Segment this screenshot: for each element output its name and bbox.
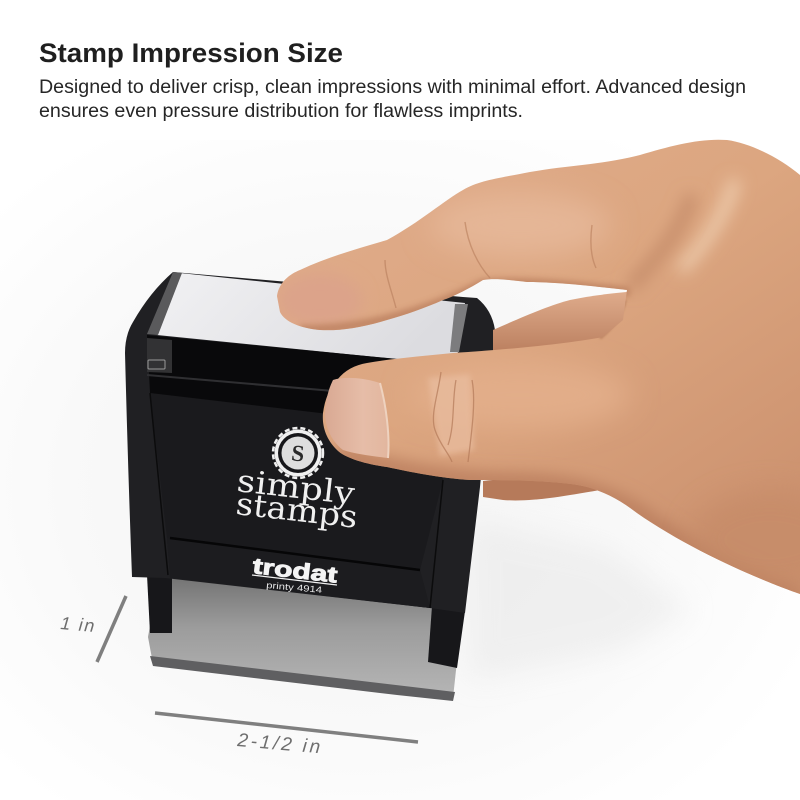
hand shading [278, 180, 800, 596]
icon: stamp [125, 272, 495, 701]
back of hand ridge highlight [680, 180, 735, 270]
model text: printy 4914: printy 4914 [266, 580, 322, 595]
lower finger behind the stamp [483, 479, 600, 500]
thumb lower shadow [337, 452, 800, 596]
stamp top rim shade [450, 304, 468, 352]
thumb top shadow fold [600, 300, 625, 338]
wrist shadow [694, 547, 787, 590]
nail cuticle [380, 383, 389, 458]
dimension label: 1 in: 1 in [60, 613, 95, 636]
stamp top pad [157, 273, 465, 365]
title: Stamp Impression Size [39, 38, 343, 68]
description [39, 77, 746, 122]
description: Designed to deliver crisp, clean impressions with minimal effort. Advanced design [39, 77, 746, 98]
middle finger behind thumb [493, 290, 650, 356]
fingertip redness [278, 282, 284, 308]
stamp band highlight [147, 375, 345, 392]
tendon shadow [630, 195, 692, 288]
dimension line: height [97, 596, 126, 662]
description: ensures even pressure distribution for flawless imprints. [39, 101, 523, 122]
logo text: stamps: stamps [234, 486, 359, 536]
stamp legs [147, 575, 172, 633]
knuckle highlight [428, 374, 474, 456]
stamp lower window [148, 570, 463, 698]
finger creases [385, 222, 596, 308]
stamp clear rim [147, 338, 172, 373]
knuckle wrinkles [433, 372, 474, 462]
logo: simply stamps emblem [273, 428, 323, 478]
logo: simply stamps emblem: S [290, 440, 306, 467]
thumb glow [472, 350, 622, 426]
stamp bottom band [167, 538, 430, 608]
dimension line: width [155, 713, 418, 742]
hand silhouette [277, 140, 800, 594]
stamp front face [150, 393, 448, 608]
logo text: simply: simply [235, 463, 357, 512]
stamp window bottom rim [150, 656, 455, 701]
thumbnail [325, 378, 389, 458]
logo text: trodat: trodat [251, 553, 340, 588]
stamp body [125, 272, 495, 613]
stamp dark band [147, 335, 450, 428]
index finger glow [430, 193, 610, 257]
illustration: hand [277, 140, 800, 596]
stamp shadow [470, 520, 690, 680]
index underside shadow [300, 283, 630, 330]
dimension label: 2-1/2 in: 2-1/2 in [236, 730, 321, 758]
